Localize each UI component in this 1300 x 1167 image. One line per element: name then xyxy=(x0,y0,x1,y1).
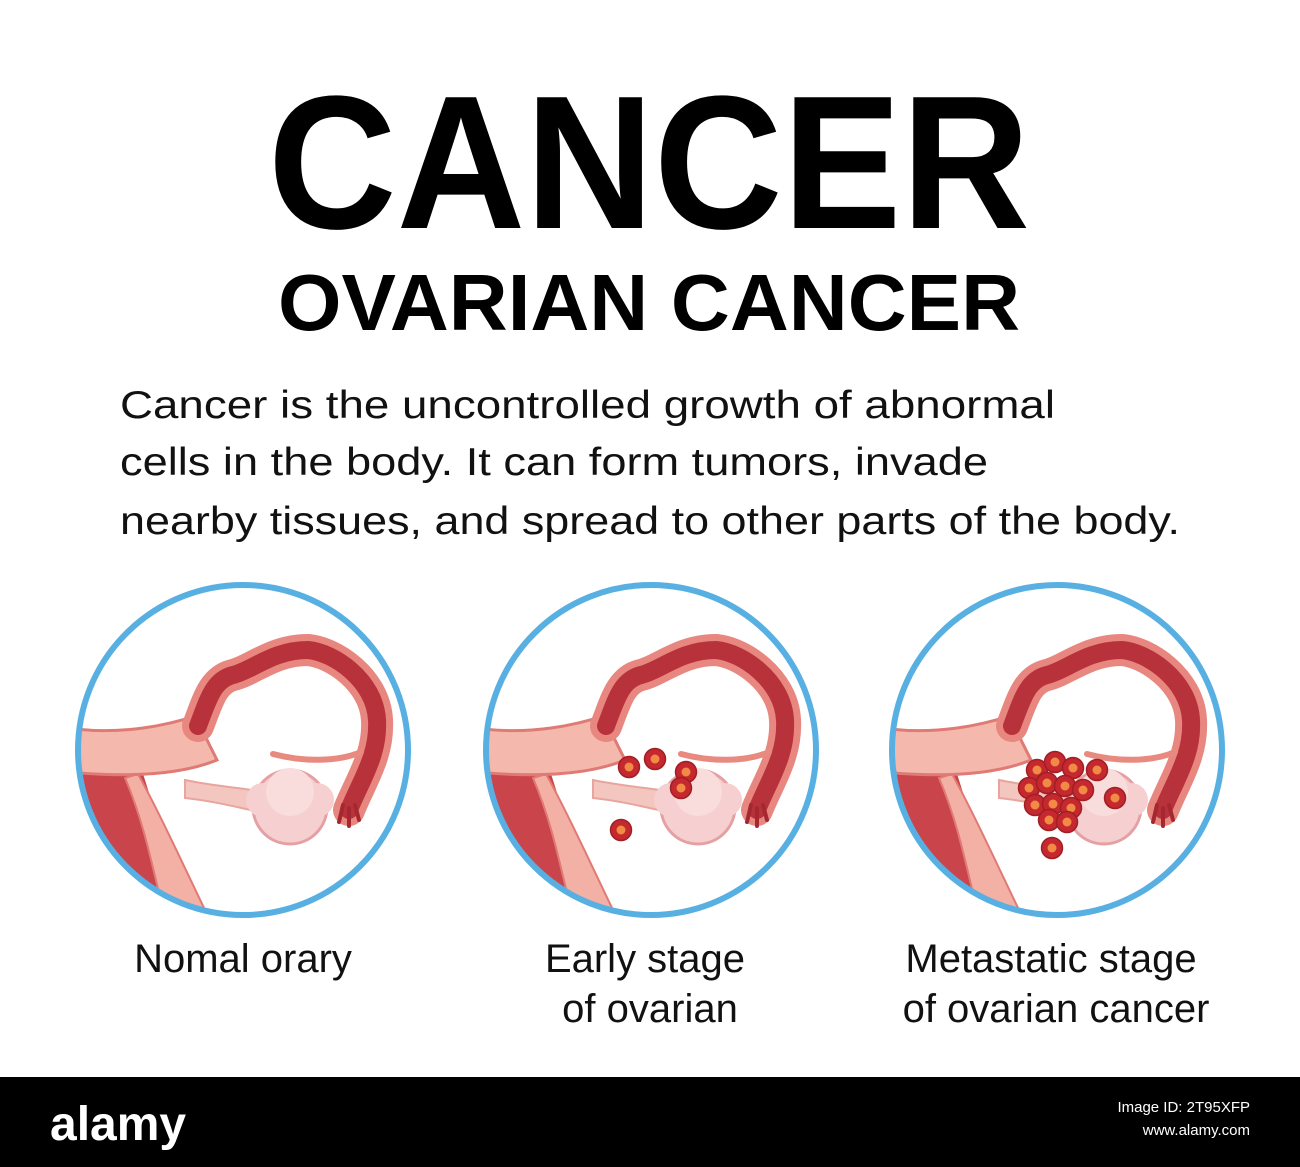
footer bar: alamy xyxy=(50,1098,186,1151)
labels xyxy=(134,937,1209,1031)
footer bar xyxy=(0,1077,1300,1167)
title: CANCER xyxy=(268,57,1030,269)
subtitle: OVARIAN CANCER xyxy=(278,258,1020,347)
labels: Early stage xyxy=(545,937,745,981)
description text: Cancer is the uncontrolled growth of abnormal xyxy=(120,384,1055,427)
panel: metastatic stage xyxy=(882,585,1222,915)
labels: Nomal orary xyxy=(134,937,352,981)
labels: of ovarian cancer xyxy=(903,987,1209,1031)
description text: nearby tissues, and spread to other parts of the body. xyxy=(120,500,1180,543)
labels: Metastatic stage xyxy=(905,937,1197,981)
description text xyxy=(120,384,1180,543)
footer bar: www.alamy.com xyxy=(1142,1122,1250,1139)
footer bar: Image ID: 2T95XFP xyxy=(1117,1099,1250,1116)
description text: cells in the body. It can form tumors, invade xyxy=(120,441,988,484)
panel: early stage xyxy=(476,585,816,915)
labels: of ovarian xyxy=(562,987,738,1031)
panel: normal ovary xyxy=(68,585,408,915)
